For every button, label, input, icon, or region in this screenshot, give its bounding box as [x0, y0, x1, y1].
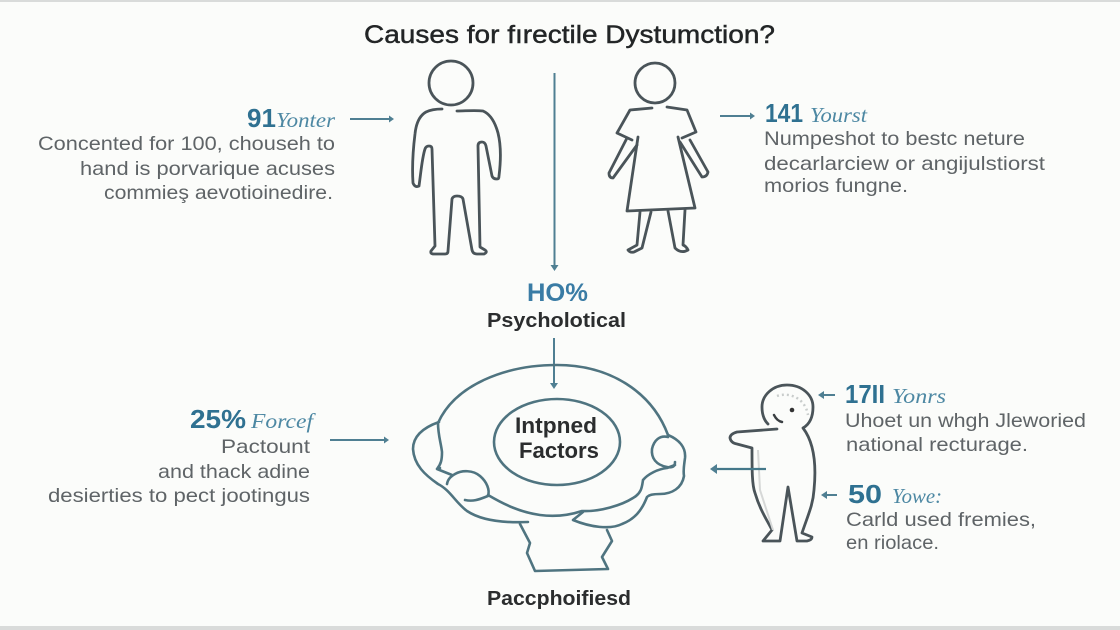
callout: lower left: 25%: [190, 404, 246, 434]
callout: lower right upper: Yonrs: [892, 384, 946, 408]
inner ellipse: [494, 399, 620, 485]
icon: brain diagram: [413, 365, 685, 571]
icon: male figure: [413, 61, 500, 254]
arrow: centre down to psychological: [550, 73, 558, 271]
stat: psychological: HO%: [527, 279, 588, 307]
inner label: factors: Intpned: [515, 413, 597, 438]
callout: top left: [38, 103, 336, 204]
callout: top left: 91: [247, 103, 276, 133]
icon: child figure: [730, 385, 815, 541]
callout: top left: Yonter: [276, 108, 336, 132]
arrow: lower left: [330, 436, 389, 444]
inner label: factors: [515, 413, 599, 463]
label: bottom: Paccphoifiesd: [487, 588, 631, 610]
callout: lower right lower: [846, 479, 1036, 554]
arrow: child to brain: [710, 464, 766, 474]
callout: lower right upper: national recturage.: [846, 434, 1028, 456]
callout: lower right lower: Carld used fremies,: [846, 509, 1036, 531]
callout: top right: morios fungne.: [764, 175, 908, 197]
callout: top right: decarlarciew or angijulstiorst: [764, 153, 1046, 175]
icon: female figure: [609, 63, 708, 252]
callout: lower left: desierties to pect jootingus: [48, 485, 310, 507]
callout: lower left: [48, 404, 317, 507]
callout: lower left: Forcef: [250, 409, 317, 433]
arrow: psychological to brain: [550, 338, 558, 389]
callout: lower left: and thack adine: [158, 461, 310, 483]
callout: top left: Concented for 100, chouseh to: [38, 133, 335, 155]
callout: top right: [764, 98, 1046, 197]
callout: lower right lower: Yowe:: [892, 484, 942, 508]
callout: lower right lower: 50: [848, 479, 882, 509]
callout: top right: Yourst: [810, 103, 868, 127]
arrow: top right: [720, 112, 755, 120]
stat: psychological: [487, 279, 626, 332]
stat: psychological: Psycholotical: [487, 310, 626, 332]
callout: lower right upper: Uhoet un whgh Jleworied: [845, 410, 1086, 432]
callout: lower right lower: en riolace.: [846, 532, 939, 554]
callout: lower left: Pactount: [221, 436, 311, 458]
callout: top right: Numpeshot to bestc neture: [764, 128, 1025, 150]
callout: top right: 141: [765, 98, 803, 128]
title: Causes for fırectile Dystumction?: [364, 21, 775, 49]
callout: top left: hand is porvarique acuses: [80, 158, 335, 180]
inner label: factors: Factors: [519, 438, 599, 463]
callout: lower right upper: 17II: [845, 379, 885, 409]
arrow: child lower callout: [821, 491, 837, 499]
arrow: top left: [350, 116, 394, 122]
callout: top left: commieş aevotioinedire.: [104, 182, 333, 204]
arrow: child upper callout: [818, 391, 835, 399]
callout: lower right upper: [845, 379, 1086, 456]
